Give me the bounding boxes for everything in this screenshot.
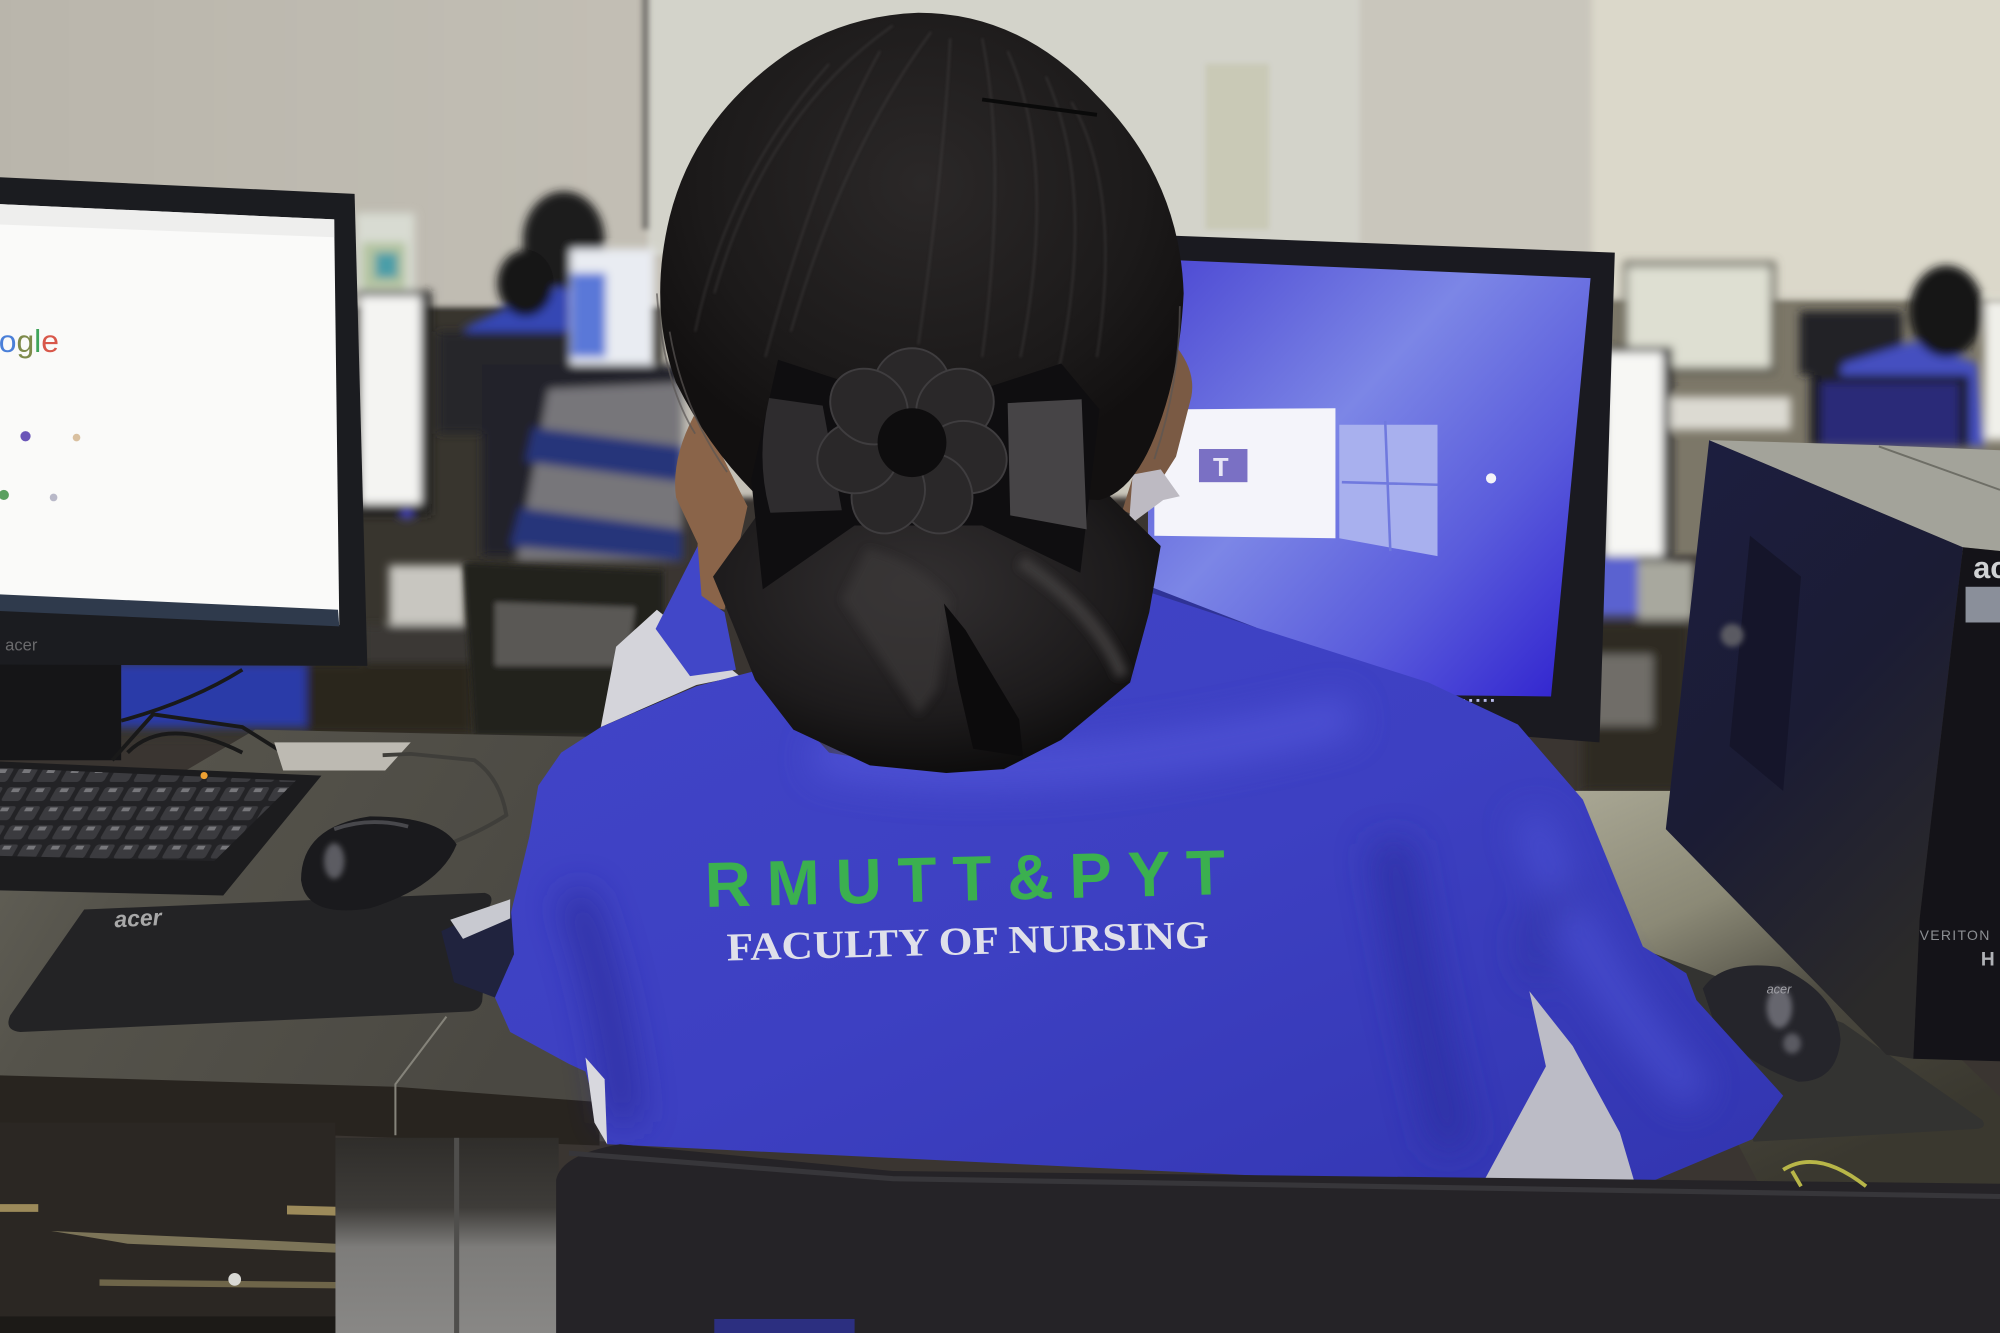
background: students, monitors and chairs xyxy=(115,191,2000,791)
ear and mask xyxy=(1122,343,1192,517)
flower petals xyxy=(809,348,1015,546)
under-desk drawers and cabinet xyxy=(0,1123,559,1333)
desk seam xyxy=(395,1017,446,1135)
background chair xyxy=(463,563,663,735)
left sleeve white xyxy=(601,610,740,727)
jacket folds and sheen xyxy=(574,714,1696,1148)
hair xyxy=(657,13,1184,500)
neck collar xyxy=(1122,561,1256,638)
monitor bezel xyxy=(1148,235,1615,742)
monitor screen xyxy=(0,204,339,625)
mouse pad, left: acer xyxy=(114,904,163,932)
cuff xyxy=(441,899,514,998)
tower top xyxy=(1709,440,2000,551)
glasses strap on desk xyxy=(1783,1162,1866,1186)
background wall and projector screen xyxy=(0,0,2000,740)
velvet bow backing xyxy=(751,360,1099,589)
flower centre xyxy=(878,408,946,477)
google logo fragment: ogle xyxy=(0,323,59,359)
mouse, right xyxy=(1703,965,1841,1082)
satin bow panels xyxy=(762,398,842,513)
white cable adapter xyxy=(274,742,411,770)
monitor stand xyxy=(0,657,121,760)
desk, right xyxy=(1569,791,2000,1186)
raised sleeve xyxy=(656,546,736,676)
cables xyxy=(112,670,287,760)
embroidered text: Faculty of Nursing: FACULTY OF NURSING xyxy=(726,913,1209,970)
mouse cable xyxy=(383,754,506,842)
monitor brand: acer xyxy=(5,636,38,655)
mouse, left xyxy=(301,816,457,910)
desk front edge xyxy=(0,1075,599,1145)
centre monitor xyxy=(1148,235,1615,742)
keyboard xyxy=(0,762,321,895)
embroidered text: RMUTT&PYT: RMUTT&PYT xyxy=(704,836,1226,921)
centre monitor: ▪ ▪ ▪ ▪ ▪ ▪ xyxy=(1454,695,1494,707)
left monitor xyxy=(0,177,367,760)
monitor screen xyxy=(1148,259,1591,696)
mouse, right: acer xyxy=(1767,982,1792,997)
hair bow xyxy=(751,348,1099,589)
pc tower: H xyxy=(1981,950,1995,971)
teams splash window xyxy=(1154,408,1335,538)
desk, left xyxy=(0,730,612,1142)
hand and face xyxy=(675,416,747,610)
pc tower: VERITON xyxy=(1920,927,1991,943)
jacket xyxy=(495,593,1783,1186)
hair net bun xyxy=(713,486,1161,773)
mouse pad, left xyxy=(8,893,491,1032)
monitor bezel xyxy=(0,177,367,666)
centre monitor: T xyxy=(1213,454,1229,482)
foreground chair xyxy=(556,1144,2000,1333)
tower front xyxy=(1913,547,2000,1061)
pc tower xyxy=(1666,440,2000,1061)
mouse pad, right xyxy=(1645,950,1984,1142)
jacket white stripes xyxy=(1480,991,1636,1189)
student xyxy=(441,13,1783,1189)
tower side xyxy=(1666,440,1963,1059)
